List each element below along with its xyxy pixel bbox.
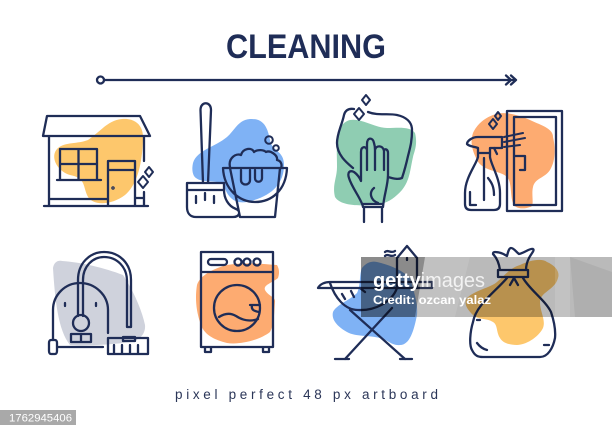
watermark logo text: gettyimages <box>373 270 485 292</box>
icon: spray bottle and window <box>465 111 562 211</box>
icon: garbage bag <box>466 248 559 357</box>
image id tag <box>0 410 76 425</box>
icon: vacuum cleaner <box>49 252 148 354</box>
icon: ironing board <box>318 246 432 359</box>
icon: house <box>43 116 153 206</box>
watermark band <box>361 257 612 317</box>
title: CLEANING <box>226 28 386 66</box>
watermark credit: Credit: ozcan yalaz <box>373 293 491 307</box>
icon: washing machine <box>196 252 279 352</box>
icon: mop and bucket <box>187 103 287 217</box>
image id tag: 1762945406 <box>9 412 72 424</box>
caption: pixel perfect 48 px artboard <box>175 387 438 402</box>
icon: gloved hand wiping <box>334 95 416 222</box>
arrow: header rule <box>97 76 516 84</box>
